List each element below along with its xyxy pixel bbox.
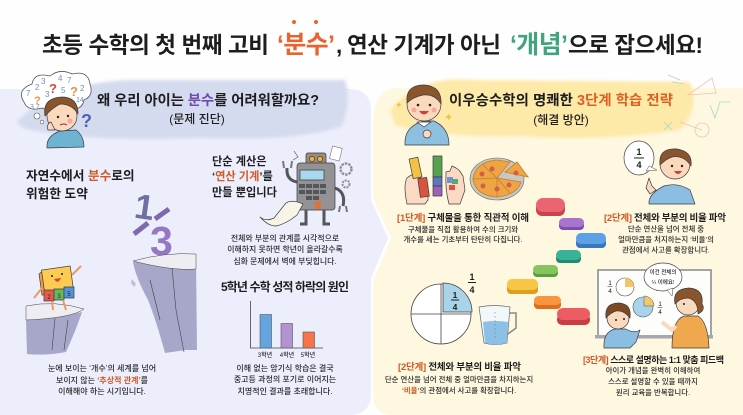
icon: block character: 5 <box>67 292 71 298</box>
speech bubble: teacher: 이건 전체의 <box>650 268 676 276</box>
icon: thought bubble with numbers: 7 <box>67 76 72 85</box>
step 3 text: [3단계] 스스로 설명하는 1:1 맞춤 피드백 <box>583 354 724 365</box>
icon: thought bubble with numbers: 3 <box>41 77 46 86</box>
step 2 text lower: 단순 연산을 넘어 전체 중 얼마만큼을 차지하는지 <box>385 375 533 384</box>
speech bubble: teacher <box>644 263 682 296</box>
heading: dangerous leap: 자연수에서 분수로의 <box>26 169 135 183</box>
step 2 text upper: 얼마만큼을 처지하는지 ‘비율’의 <box>618 235 714 244</box>
step 2 text lower: ‘비율’의 관점에서 사고를 확장합니다. <box>402 386 516 395</box>
right heading: 이우승수학의 명쾌한 3단계 학습 전략 <box>449 92 673 109</box>
whiteboard pie charts <box>608 278 662 317</box>
chart: quarter circle <box>411 272 476 344</box>
text: machine explanation: 전체와 부분의 관계를 시각적으로 <box>231 233 339 243</box>
heading: calculation machine: 단순 계산은 <box>212 154 267 168</box>
icon: block character: 2 <box>47 295 51 301</box>
text: concrete to abstract: 눈에 보이는 ‘개수’의 세계를 넘어 <box>48 363 156 373</box>
text: concrete to abstract: 이해해야 하는 시기입니다. <box>58 386 146 396</box>
whiteboard pie charts: 1 <box>658 301 662 308</box>
step 3 text: 원리 교육을 반복합니다. <box>616 388 690 397</box>
icon: calculator robot <box>260 146 352 226</box>
icon: thought bubble with numbers <box>21 71 91 124</box>
illustration: right cliff <box>131 254 197 353</box>
title: 초등 수학의 첫 번째 고비 <box>42 33 269 58</box>
stepping stones path <box>507 198 606 325</box>
whiteboard pie charts: 1 <box>608 280 612 287</box>
chart: quarter circle: 1 <box>453 290 458 300</box>
heading: dangerous leap: 위험한 도약 <box>26 186 88 201</box>
icon: thought bubble with numbers: 4 <box>58 74 63 83</box>
text: machine explanation <box>227 233 343 266</box>
icon: thought bubble with numbers: 5 <box>61 86 66 95</box>
bar chart: grades: 3학년 <box>258 351 272 359</box>
icon: thought bubble with numbers: ? <box>49 81 57 96</box>
step 2 text lower: [2단계] 전체와 부분의 비율 파악 <box>398 361 521 373</box>
title highlight: fractions: ‘분수’ <box>277 31 335 59</box>
right heading banner wash <box>390 79 693 138</box>
step 2 text upper: 단순 연산을 넘어 전체 중 <box>628 224 704 234</box>
speech bubble: one quarter <box>624 141 657 175</box>
speech bubble: teacher: ¼ 이에요! <box>652 278 675 286</box>
icon: happy boy <box>395 85 453 145</box>
speech bubble: one quarter: 1 <box>636 147 642 157</box>
left heading <box>97 92 319 126</box>
icon: thought bubble with numbers: 2 <box>80 84 85 93</box>
bar chart: grades <box>250 301 323 359</box>
icon: measuring cup <box>479 306 516 344</box>
heading: calculation machine: ‘연산 기계’를 <box>212 169 273 183</box>
icon: thought bubble with numbers: 14 <box>76 97 84 104</box>
icon: thought bubble with numbers: ? <box>70 84 78 99</box>
whiteboard pie charts: 4 <box>658 309 662 316</box>
text: concrete to abstract: 보이지 않는 ‘추상적 관계’를 <box>56 375 148 385</box>
text: machine explanation: 심화 문제에서 벽에 부딪힙니다. <box>233 256 337 266</box>
icon: pizza <box>470 158 528 200</box>
icon: hands with stacking blocks <box>405 156 465 204</box>
heading: calculation machine: 만들 뿐입니다 <box>212 185 278 199</box>
left heading: 왜 우리 아이는 분수를 어려워할까요? <box>97 92 319 109</box>
title highlight: concept: ‘개념’ <box>510 31 568 59</box>
illustration: whiteboard lesson <box>595 263 713 348</box>
icon: thought bubble with numbers: 3 7 <box>30 104 40 111</box>
speech bubble: one quarter: 4 <box>636 160 642 170</box>
text: grade decline explanation: 중고등 과정의 포기로 이어지는 <box>234 374 336 384</box>
icon: happy boy: ✦ <box>395 100 403 110</box>
heading: calculation machine <box>212 154 278 199</box>
step 2 text upper <box>604 212 726 254</box>
left heading: (문제 진단) <box>169 112 225 126</box>
icon: happy boy: ✦ <box>444 112 453 124</box>
panel: solution strategy <box>373 88 743 415</box>
step 2 text upper: 관점에서 사고를 확장합니다. <box>622 246 710 254</box>
step 3 text <box>583 354 724 397</box>
step 1 text <box>397 212 529 244</box>
panel: problem diagnosis <box>0 89 388 415</box>
chart: quarter circle: 4 <box>469 285 475 295</box>
heading: grade decline cause: 5학년 수학 성적 하락의 원인 <box>221 279 349 294</box>
text: concrete to abstract <box>48 363 156 396</box>
heading: dangerous leap <box>26 169 135 201</box>
icon: block character: 3 <box>57 294 61 300</box>
decoration: math doodles <box>664 75 730 137</box>
left heading banner wash <box>18 80 348 139</box>
right heading <box>449 92 673 127</box>
text: grade decline explanation: 치명적인 결과를 초래합니다. <box>238 386 332 396</box>
icon: explaining boy <box>646 149 695 204</box>
step 3 text: 아이가 개념을 완벽히 이해하여 <box>606 366 700 375</box>
boy student <box>604 303 640 348</box>
icon: falling fraction one third <box>132 187 173 264</box>
icon: thought bubble with numbers: 2 <box>35 83 40 92</box>
title <box>42 20 703 59</box>
icon: thought bubble with numbers: 7 <box>26 89 31 98</box>
text: grade decline explanation <box>234 363 336 396</box>
step 1 text: 개수를 세는 기초부터 탄탄히 다집니다. <box>403 235 523 244</box>
icon: worried boy: ? <box>81 111 92 131</box>
chart: quarter circle: 1 <box>469 272 475 282</box>
title: 연산 기계가 아닌 <box>347 33 501 58</box>
illustration: left cliff <box>26 304 84 355</box>
icon: thought bubble with numbers: 3 <box>45 90 50 99</box>
text: machine explanation: 이해하지 못하면 학년이 올라갈수록 <box>227 244 343 254</box>
step 1 text: [1단계] 구체물을 통한 직관적 이해 <box>397 212 529 224</box>
bar chart: grades: 5학년 <box>301 351 315 359</box>
icon: thought bubble with numbers: ? <box>34 95 41 107</box>
title: 으로 잡으세요! <box>568 33 703 58</box>
icon: worried boy <box>45 97 92 148</box>
icon: block character <box>34 266 81 310</box>
step 3 text: 스스로 설명할 수 있을 때까지 <box>608 377 698 386</box>
right heading: (해결 방안) <box>533 113 589 127</box>
step 2 text lower <box>385 361 533 395</box>
icon: falling fraction one third: 3 <box>150 218 173 264</box>
step 1 text: 구체물을 직접 활용하여 수의 크기와 <box>408 225 518 234</box>
text: grade decline explanation: 이해 없는 암기식 학습은 결국 <box>236 363 334 373</box>
title: , <box>336 33 342 58</box>
step 2 text upper: [2단계] 전체와 부분의 비율 파악 <box>604 212 726 224</box>
teacher <box>662 288 709 348</box>
bar chart: grades: 4학년 <box>280 351 294 359</box>
chart: quarter circle: 4 <box>453 302 458 312</box>
icon: falling fraction one third: 1 <box>132 187 157 228</box>
whiteboard pie charts: 4 <box>608 288 612 295</box>
